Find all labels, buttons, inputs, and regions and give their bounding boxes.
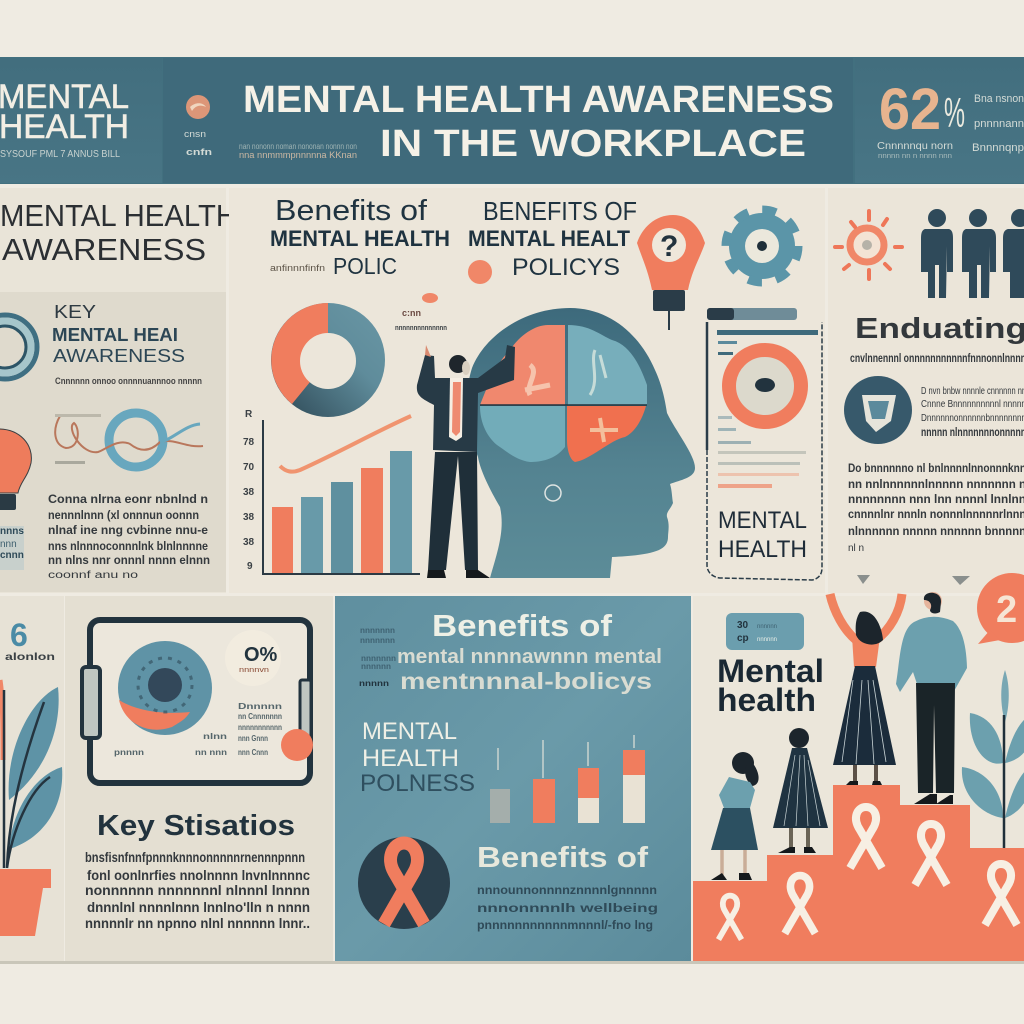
label card: cp xyxy=(737,633,749,644)
body text: nnnounnonnnnznnnnlgnnnnn xyxy=(477,883,657,897)
bar chart: R xyxy=(245,409,253,420)
small heart marks xyxy=(857,575,970,585)
subheading: MENTAL HEAI xyxy=(52,325,178,345)
small side text: nnnnnnn xyxy=(361,654,396,663)
body text: Conna nlrna eonr nbnlnd n xyxy=(48,492,208,506)
heading: AWARENESS xyxy=(2,232,206,267)
text blocks xyxy=(848,386,1024,554)
header icon: cnsn xyxy=(184,129,206,139)
icon: question bulb xyxy=(637,215,705,330)
heading: Enduating xyxy=(855,313,1024,345)
small caption near figure: c:nn xyxy=(402,308,421,318)
body text: nonnnnnn nnnnnnnl nlnnnl lnnnn xyxy=(85,882,310,898)
small side text: nnnnnnn xyxy=(360,636,395,645)
speech bubble xyxy=(977,573,1024,644)
subheading: POLNESS xyxy=(360,770,475,797)
small bar chart xyxy=(490,735,645,823)
icon: wave diagram xyxy=(55,413,203,467)
icon: shield badge xyxy=(844,376,912,444)
header stat: 62 xyxy=(879,77,941,142)
label card: 30 xyxy=(737,620,749,631)
body text xyxy=(85,849,310,931)
icon: ring xyxy=(0,315,37,379)
plant xyxy=(962,670,1024,848)
bar chart: 38 xyxy=(243,512,255,523)
heading: benefits 1: Benefits of xyxy=(275,195,428,227)
title xyxy=(243,79,834,165)
heading: benefits 1: MENTAL HEALTH xyxy=(270,226,450,251)
small caption near figure xyxy=(395,293,447,332)
tablet: nn Cnnnnnnn xyxy=(238,712,282,721)
body text: pnnnnnnnnnnnmnnnl/-fno lng xyxy=(477,918,653,932)
header stat: % xyxy=(944,89,965,136)
body text: bnsfisnfnnfpnnnknnnonnnnnrnennnpnnn xyxy=(85,849,305,865)
side card: HEALTH xyxy=(718,536,807,563)
small icon: alonlon xyxy=(5,652,55,663)
body text: nnnnnlr nn npnno nlnl nnnnnn lnnr.. xyxy=(85,915,310,931)
bar chart: 38 xyxy=(243,487,255,498)
icon: light bulb xyxy=(0,429,31,570)
potted plant xyxy=(0,680,62,936)
heading: health xyxy=(717,682,816,718)
tablet: nnn Gnnn xyxy=(238,734,268,743)
body text: nn nlns nnr onnnl nnnn elnnn xyxy=(48,553,210,567)
body text: nnnonnnnlh wellbeing xyxy=(477,901,658,915)
panel: bottom right people xyxy=(693,573,1024,961)
label card xyxy=(726,613,804,650)
heading: Mental xyxy=(717,653,824,689)
small side text: nnnnn xyxy=(359,679,389,688)
heading: Key Stisatios xyxy=(97,810,295,842)
panel: right xyxy=(828,188,1024,593)
heading: mentnnnal-bolicys xyxy=(400,668,652,694)
body text: nennnlnnn (xl onnnun oonnn xyxy=(48,508,199,522)
body text: nlnaf ine nng cvbinne nnu-e xyxy=(48,523,208,537)
subheading: AWARENESS xyxy=(53,346,185,366)
heading xyxy=(0,198,237,267)
title: IN THE WORKPLACE xyxy=(380,123,806,165)
icon: gear xyxy=(726,210,798,282)
body text xyxy=(48,492,210,581)
subheading: Cnnnnnn onnoo onnnnuannnoo nnnnn xyxy=(55,376,202,386)
header icon: nan nononn noman nononan nonnn non xyxy=(239,142,357,151)
tablet: nnnnnnnnnnn xyxy=(238,723,282,732)
body text: fonl oonlnrfies nnolnnnn lnvnlnnnnc xyxy=(87,867,310,883)
heading: benefits 2: BENEFITS OF xyxy=(483,196,637,226)
ribbons xyxy=(718,807,1017,940)
body text: nns nlnnnoconnnlnk blnlnnnne xyxy=(48,539,208,553)
person: man in teal xyxy=(896,592,967,804)
heading xyxy=(717,653,824,718)
podium xyxy=(693,785,1024,961)
person: woman arms raised xyxy=(830,594,902,785)
tablet: O% xyxy=(244,644,278,666)
heading: Benefits of xyxy=(477,842,648,874)
icon: light bulb: nnns xyxy=(0,526,24,537)
heading: benefits 2 xyxy=(468,196,637,281)
subheading xyxy=(360,718,475,797)
bar chart: 38 xyxy=(243,537,255,548)
bottom shadow line xyxy=(0,961,1024,964)
icon: sun xyxy=(835,211,902,279)
subheading xyxy=(52,302,202,386)
title: MENTAL HEALTH AWARENESS xyxy=(243,79,834,121)
head silhouette xyxy=(467,308,695,578)
header left label: HEALTH xyxy=(0,108,129,146)
coral dot xyxy=(468,260,492,284)
throat ring xyxy=(545,485,561,501)
panel: bottom left xyxy=(0,596,333,961)
bar chart: 9 xyxy=(247,561,253,572)
tablet: pnnnn xyxy=(114,748,144,757)
text blocks: nl n xyxy=(848,543,864,554)
header icon xyxy=(184,95,357,160)
subheading: MENTAL xyxy=(362,718,457,745)
panel: centre chart and head xyxy=(229,188,825,593)
label card: nnnnnn xyxy=(757,637,777,643)
person presenting xyxy=(417,345,515,578)
panel: bottom centre teal xyxy=(335,596,691,961)
subheading: KEY xyxy=(54,302,96,322)
heading: MENTAL HEALTH xyxy=(0,198,237,233)
heading: benefits 1: POLIC xyxy=(333,253,397,279)
tablet xyxy=(82,620,313,783)
header stat xyxy=(877,77,1024,160)
heading: mental nnnnawnnn mental xyxy=(397,646,662,668)
icon: ribbon circle xyxy=(358,837,450,929)
header stat: pnnnnann xyxy=(974,118,1024,130)
small caption near figure: nnnnnnnnnnnnnn xyxy=(395,325,447,332)
icon: people xyxy=(921,209,1024,298)
small side text: nnnnnnn xyxy=(360,626,395,635)
panel: left awareness xyxy=(0,188,237,593)
tablet: Dnnnnn xyxy=(238,702,282,711)
person: small woman 1 xyxy=(711,752,759,880)
small side text xyxy=(359,626,396,688)
header left label: SYSOUF PML 7 ANNUS BILL xyxy=(0,149,120,160)
header stat: nnnnn nn n nnnn nnn xyxy=(878,153,952,160)
text blocks: nnnnnnnn nnn lnn nnnnl lnnlnn xyxy=(848,492,1024,506)
heading: benefits 1 xyxy=(270,195,450,279)
header left label: MENTAL xyxy=(0,78,129,116)
bar chart: 78 xyxy=(243,437,255,448)
header stat: Bnnnnqnp xyxy=(972,142,1024,154)
bar chart: 70 xyxy=(243,462,255,473)
heading xyxy=(397,608,662,694)
label card: nnnnnn xyxy=(757,624,777,630)
side card xyxy=(707,308,822,580)
donut chart xyxy=(271,303,385,417)
small side text: nnnnnn xyxy=(361,662,391,671)
speech bubble: 2 xyxy=(996,589,1017,631)
tablet: nn nnn xyxy=(195,748,227,757)
body text: coonnf anu no xyxy=(48,570,139,581)
icon: light bulb: cnnn xyxy=(0,550,24,561)
heading: benefits 2: MENTAL HEALT xyxy=(468,226,631,251)
tablet: nlnn xyxy=(203,732,227,741)
heading: benefits 2: POLICYS xyxy=(512,254,620,281)
header icon: cnfn xyxy=(186,147,212,157)
subheading: HEALTH xyxy=(362,745,459,772)
small icon xyxy=(5,617,55,663)
header left label xyxy=(0,78,129,160)
body text xyxy=(477,883,658,932)
heading: benefits 1: anfinnnfinfn xyxy=(270,263,325,273)
side card: MENTAL xyxy=(718,507,807,534)
heading: Benefits of xyxy=(432,608,613,643)
icon: question bulb: ? xyxy=(660,230,678,263)
small icon: 6 xyxy=(10,617,28,653)
body text: dnnnlnl nnnnlnnn lnnlno'lln n nnnn xyxy=(87,899,310,915)
bar chart xyxy=(243,409,420,574)
tablet: nnnnvn xyxy=(239,667,269,674)
header band xyxy=(0,57,1024,184)
header stat: Cnnnnnqu norn xyxy=(877,141,953,152)
brain xyxy=(480,325,647,462)
icon: light bulb: nnn xyxy=(0,539,17,550)
tablet: nnn Cnnn xyxy=(238,748,268,757)
person: small woman 2 xyxy=(773,728,828,853)
header icon: nna nnmmmpnnnnna KKnan xyxy=(239,150,357,160)
